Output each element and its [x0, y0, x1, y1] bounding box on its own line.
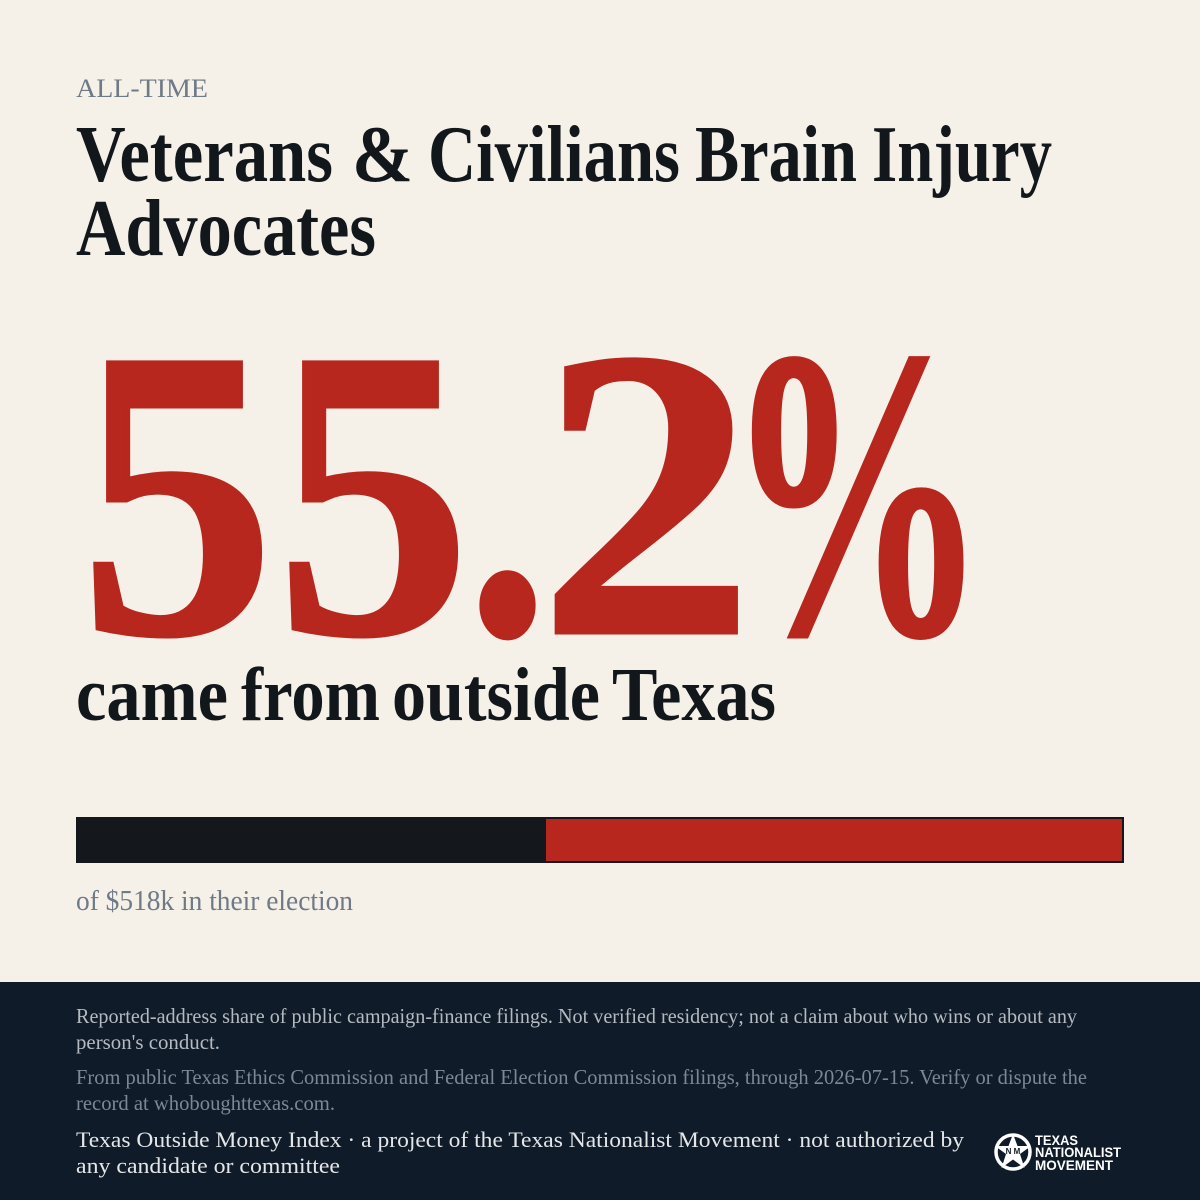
title: Veterans	[76, 111, 333, 199]
icon: star in circle: N M	[1006, 1147, 1021, 1156]
logo: Texas Nationalist Movement	[995, 1133, 1122, 1173]
stacked share bar	[76, 817, 1124, 863]
source note: record at whoboughttexas.com.	[76, 1091, 335, 1115]
footer panel	[0, 982, 1200, 1200]
headline statistic: 5	[79, 264, 275, 723]
eyebrow label: ALL-TIME	[76, 74, 208, 103]
headline statistic	[79, 264, 987, 723]
disclaimer note: Reported-address share of public campaign-finance filings. Not verified residency; not a claim about who wins or about any	[76, 1004, 1077, 1028]
title: Advocates	[76, 185, 376, 273]
headline statistic: .	[466, 264, 549, 723]
logo wordmark: MOVEMENT	[1035, 1158, 1114, 1173]
title: Injury	[872, 111, 1052, 199]
title	[76, 111, 1052, 273]
logo wordmark: TEXAS	[1035, 1133, 1078, 1148]
title: &	[352, 111, 413, 199]
statistic caption: from	[241, 653, 380, 737]
disclaimer note	[76, 1004, 1077, 1054]
statistic caption: Texas	[612, 653, 776, 737]
bar caption: of $518k in their election	[76, 885, 353, 917]
project credit	[76, 1127, 964, 1178]
statistic caption	[76, 653, 776, 737]
statistic caption: came	[76, 653, 228, 737]
source note: From public Texas Ethics Commission and Federal Election Commission filings, through 2026-07-15. Verify or dispute the	[76, 1065, 1087, 1089]
disclaimer note: person's conduct.	[76, 1030, 220, 1054]
logo wordmark	[1035, 1133, 1122, 1173]
headline statistic: 5	[275, 264, 471, 723]
logo wordmark: NATIONALIST	[1035, 1145, 1122, 1160]
project credit: Texas Outside Money Index · a project of the Texas Nationalist Movement · not authorized by	[76, 1127, 964, 1152]
source note	[76, 1065, 1087, 1115]
statistic caption: outside	[392, 653, 600, 737]
title: Civilians	[428, 111, 680, 199]
headline statistic: %	[726, 264, 987, 723]
title: Brain	[695, 111, 857, 199]
project credit: any candidate or committee	[76, 1153, 340, 1178]
headline statistic: 2	[538, 264, 755, 723]
